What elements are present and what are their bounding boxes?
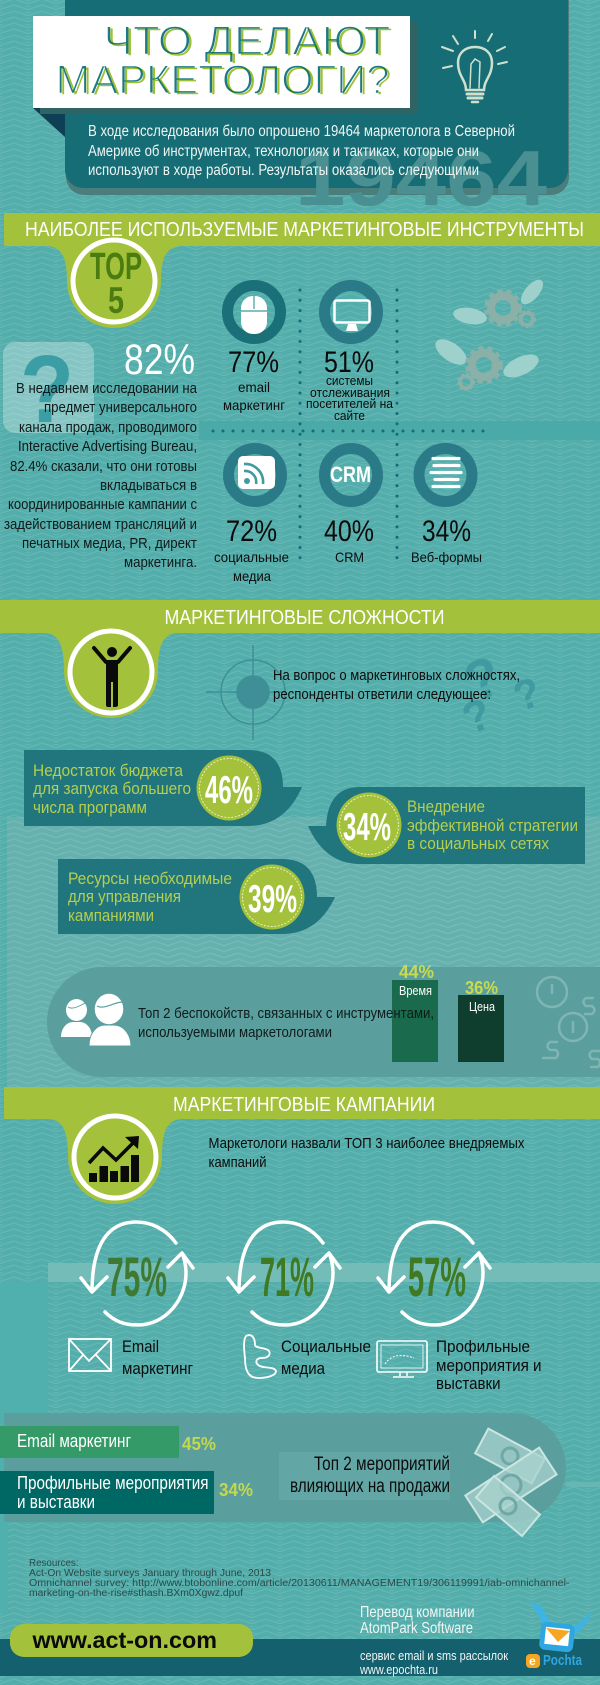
icon: question marks: ?	[455, 689, 499, 744]
concerns text: Топ 2 беспокойств, связанных с инструментами,	[138, 1005, 434, 1022]
stat circle: 57%: 57%	[408, 1245, 466, 1308]
icon: monitor	[324, 286, 378, 338]
icon: money bills	[465, 1429, 557, 1536]
label: events: мероприятия и	[436, 1356, 542, 1375]
translation credit: Перевод компании	[360, 1604, 474, 1621]
resources text: Resources:	[29, 1558, 78, 1569]
callout: budget: Недостаток бюджета	[33, 761, 183, 780]
concerns text	[138, 1005, 434, 1041]
paragraph: 82% explanation	[4, 380, 198, 571]
translation credit	[359, 1604, 508, 1677]
stat: email marketing: маркетинг	[223, 397, 285, 413]
logo: ePochta: Pochta	[543, 1652, 583, 1669]
bar chart: concerns: 44%	[399, 962, 434, 982]
label: social media: Социальные	[281, 1337, 371, 1356]
section banner: tools	[4, 213, 600, 328]
paragraph: 82% explanation: координированные кампании с	[8, 496, 197, 513]
icon: question marks	[455, 643, 547, 744]
logo: ePochta: e	[529, 1654, 536, 1668]
icon: event screen	[377, 1341, 427, 1377]
bar: email marketing	[0, 1426, 216, 1458]
title text: ЧТО ДЕЛАЮТ	[106, 19, 393, 65]
title text: МАРКЕТОЛОГИ?	[56, 56, 390, 102]
stat: visitor tracking: 51%	[324, 346, 374, 379]
stat: visitor tracking	[306, 346, 394, 423]
paragraph: 82% explanation: канала продаж, проводимого	[19, 419, 197, 436]
section banner: campaigns	[4, 1087, 600, 1204]
url pill	[10, 1624, 253, 1657]
stat: visitor tracking: системы	[326, 373, 373, 388]
label: email marketing: Email	[122, 1337, 159, 1356]
panel: top 2 sales activities	[0, 1413, 600, 1536]
icon: crm: CRM	[330, 462, 371, 487]
questions intro text: На вопрос о маркетинговых сложностях,	[273, 667, 520, 684]
bar: events: Профильные мероприятия	[17, 1473, 208, 1493]
resources text: Omnichannel survey: http://www.btobonline.com/article/20130611/MANAGEMENT19/306119991/iab-omnichannel-	[29, 1578, 570, 1589]
stat: crm: 40%	[324, 515, 374, 548]
callout: social strategy: 34%	[343, 806, 391, 849]
stat: web forms: Веб-формы	[411, 549, 482, 565]
sales activities text: влияющих на продажи	[290, 1476, 450, 1497]
stat: crm	[324, 515, 374, 565]
title text: МАРКЕТОЛОГИ?	[58, 58, 392, 104]
icon: web forms	[419, 448, 472, 502]
label: email marketing	[122, 1337, 193, 1378]
label: events	[436, 1337, 542, 1393]
logo: ePochta	[526, 1601, 594, 1669]
stat: visitor tracking: отслеживания	[310, 385, 390, 400]
icon: envelope	[69, 1339, 111, 1371]
icon: target	[206, 645, 286, 740]
stat: 82%: 82%	[124, 336, 195, 384]
horizontal band	[199, 421, 600, 440]
sales activities text: Топ 2 мероприятий	[314, 1454, 450, 1475]
translation credit: сервис email и sms рассылок	[360, 1648, 508, 1663]
campaigns intro text: кампаний	[208, 1154, 266, 1171]
paragraph: 82% explanation: вкладываться в	[100, 477, 197, 494]
bar: email marketing: Email маркетинг	[17, 1431, 131, 1451]
bar: email marketing: 45%	[182, 1434, 216, 1454]
questions intro text	[273, 667, 520, 703]
title text: ЧТО ДЕЛАЮТ	[104, 18, 390, 64]
intro text: используют в ходе работы. Результаты оказались следующими	[88, 162, 479, 179]
stat circle: 71%: 71%	[260, 1245, 314, 1308]
sales activities text	[290, 1454, 450, 1497]
questions intro text: респонденты ответили следующее:	[273, 686, 491, 703]
icon: clocks and dollars	[537, 977, 600, 1067]
stat: visitor tracking: посетителей на	[306, 396, 394, 411]
label: email marketing: маркетинг	[122, 1359, 193, 1378]
stat: visitor tracking: сайте	[334, 408, 365, 423]
watermark number 19464: 19464	[295, 134, 547, 222]
stat circle: 75%	[81, 1222, 193, 1325]
stat circle: 57%	[378, 1222, 490, 1325]
bar chart: concerns	[392, 962, 504, 1062]
footer band	[0, 1639, 600, 1676]
badge: top 5	[73, 240, 155, 322]
callout: social strategy: эффективной стратегии	[407, 816, 578, 835]
stat: web forms	[411, 515, 482, 565]
title text	[56, 18, 393, 104]
callout: resources: кампаниями	[68, 906, 154, 925]
badge: person with raised arms	[70, 631, 152, 713]
concerns text: используемыми маркетологами	[138, 1024, 332, 1041]
icon: twitter t	[244, 1335, 276, 1378]
resources text: Act-On Website surveys January through June, 2013	[29, 1568, 271, 1579]
intro text: Америке об инструментах, технологиях и тактиках, которые они	[88, 143, 479, 160]
section banner: difficulties	[0, 600, 600, 718]
question mark box	[3, 336, 94, 443]
paragraph: 82% explanation: Interactive Advertising Bureau,	[18, 438, 197, 455]
callout: social strategy: в социальных сетях	[407, 834, 549, 853]
bar: events: 34%	[219, 1480, 253, 1500]
callout: budget: для запуска большего	[33, 779, 191, 798]
translation credit: www.epochta.ru	[359, 1662, 438, 1677]
icon: question marks: ?	[455, 643, 510, 714]
stat circle: 71%	[228, 1222, 340, 1325]
intro text	[88, 123, 515, 179]
stat: email marketing: email	[238, 379, 270, 395]
resources text: marketing-on-the-rise#sthash.BXm0Xgwz.dpuf	[29, 1588, 243, 1599]
paragraph: 82% explanation: задействованием трансляций и	[4, 516, 197, 533]
callout: social strategy: Внедрение	[407, 797, 485, 816]
callout: resources: для управления	[68, 887, 181, 906]
panel: top 2 concerns	[47, 962, 600, 1077]
icon: question marks: ?	[507, 668, 547, 720]
resources text	[29, 1558, 570, 1599]
callout: budget: числа программ	[33, 798, 147, 817]
stat: email marketing	[223, 346, 285, 413]
badge: growth chart	[74, 1116, 156, 1198]
icon: crm	[324, 448, 378, 502]
label: social media: медиа	[281, 1359, 325, 1378]
callout: budget: 46%	[205, 769, 253, 812]
callout: resources: Ресурсы необходимые	[68, 869, 232, 888]
icon: rss	[228, 448, 282, 502]
bar: events	[0, 1471, 253, 1514]
icon: winged gears	[431, 276, 547, 390]
stat: social media: медиа	[233, 568, 271, 584]
section banner: difficulties: МАРКЕТИНГОВЫЕ СЛОЖНОСТИ	[164, 606, 444, 629]
section banner: campaigns: МАРКЕТИНГОВЫЕ КАМПАНИИ	[173, 1093, 435, 1116]
bar chart: concerns: Время	[399, 983, 432, 998]
paragraph: 82% explanation: 82.4% сказали, что они готовы	[10, 458, 197, 475]
stat circle: 75%: 75%	[107, 1245, 167, 1308]
icon: light bulb	[442, 31, 507, 102]
icon: mouse	[228, 286, 280, 338]
label: events: Профильные	[436, 1337, 530, 1356]
stat: crm: CRM	[335, 549, 364, 565]
stat: web forms: 34%	[422, 515, 471, 548]
intro text: В ходе исследования было опрошено 19464 маркетолога в Северной	[88, 123, 515, 140]
callout: social strategy	[308, 787, 585, 864]
stat: social media	[214, 515, 289, 584]
icon: two people	[61, 993, 131, 1046]
paragraph: 82% explanation: печатных медиа, PR, директ	[22, 535, 197, 552]
badge: top 5: 5	[108, 280, 124, 321]
campaigns intro text	[208, 1135, 525, 1171]
callout: resources	[58, 859, 335, 934]
paragraph: 82% explanation: В недавнем исследовании на	[16, 380, 198, 397]
stat: social media: социальные	[214, 549, 289, 565]
label: social media	[281, 1337, 371, 1378]
title card	[33, 16, 417, 137]
paragraph: 82% explanation: предмет универсального	[44, 399, 197, 416]
question mark box: ?	[20, 336, 74, 443]
header panel	[65, 0, 569, 222]
campaigns intro text: Маркетологи назвали ТОП 3 наиболее внедряемых	[208, 1135, 525, 1152]
bar chart: concerns: 36%	[465, 978, 498, 998]
url pill: www.act-on.com	[31, 1627, 217, 1653]
label: events: выставки	[436, 1374, 500, 1393]
translation credit: AtomPark Software	[360, 1620, 473, 1637]
callout: resources: 39%	[248, 878, 297, 921]
bar: events: и выставки	[17, 1492, 95, 1512]
paragraph: 82% explanation: маркетинга.	[124, 554, 197, 571]
stat: social media: 72%	[226, 515, 277, 548]
bar chart: concerns: Цена	[469, 999, 496, 1014]
badge: top 5: TOP	[90, 246, 142, 288]
stat: email marketing: 77%	[228, 346, 279, 379]
callout: budget	[24, 750, 302, 826]
